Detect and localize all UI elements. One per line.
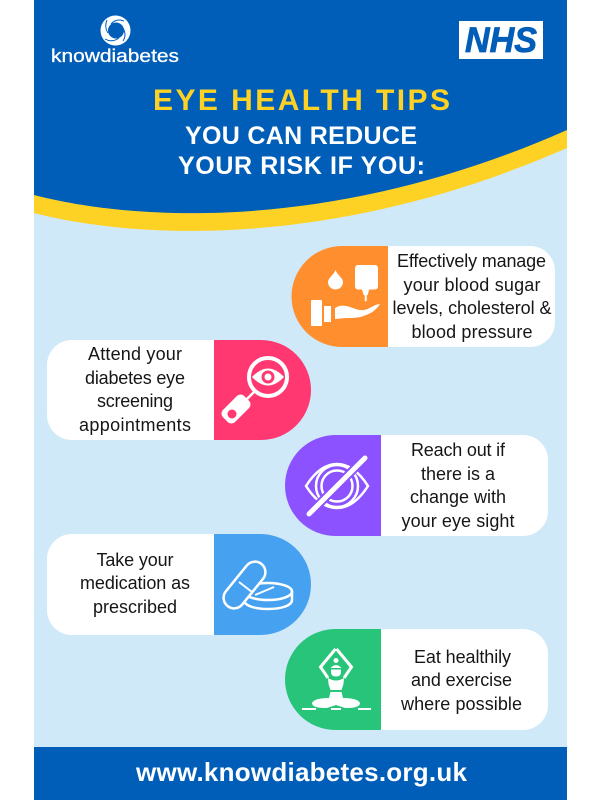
tip: manage blood sugar (292, 246, 555, 347)
text: your eye sight (402, 511, 514, 531)
tip: medication (47, 534, 311, 635)
tip: eat and exercise (285, 629, 548, 730)
logo: NHS: NHS (465, 21, 537, 60)
text (402, 440, 514, 531)
text: Take your (96, 550, 174, 570)
text: blood pressure (412, 322, 532, 342)
text: where possible (400, 694, 522, 714)
tip: reach out (285, 435, 548, 536)
text: Eat healthily (414, 647, 511, 667)
tip: eye screening (47, 340, 311, 440)
icon: person meditating (302, 649, 371, 710)
text: change with (410, 487, 506, 507)
text: there is a (421, 464, 496, 484)
website address: www.knowdiabetes.org.uk (135, 757, 468, 787)
text (80, 550, 190, 617)
text: screening (97, 391, 173, 411)
subtitle (178, 122, 425, 180)
title: EYE HEALTH TIPS (153, 84, 450, 117)
icon: magnifier over eye (219, 358, 287, 426)
icon: hand with drop and drip bag (311, 265, 380, 326)
icon: capsule and tablet (219, 557, 292, 613)
text: medication as (80, 573, 190, 593)
logo: know diabetes: knowdiabetes (51, 46, 179, 66)
text: Effectively manage (397, 251, 546, 271)
text: levels, cholesterol & (392, 298, 552, 318)
footer bar (34, 747, 567, 800)
text: Reach out if (411, 440, 506, 460)
header banner (34, 0, 567, 231)
text: prescribed (93, 597, 177, 617)
logo: know diabetes (51, 16, 179, 66)
subtitle: YOU CAN REDUCE (185, 122, 417, 150)
subtitle: YOUR RISK IF YOU: (178, 152, 425, 180)
text: appointments (79, 415, 191, 435)
text (392, 251, 552, 342)
text (79, 344, 191, 435)
text: Attend your (88, 344, 182, 364)
text: diabetes eye (85, 368, 185, 388)
icon: crossed-out eye (306, 458, 368, 514)
text: and exercise (411, 670, 512, 690)
text (400, 647, 522, 714)
text: your blood sugar (404, 275, 540, 295)
